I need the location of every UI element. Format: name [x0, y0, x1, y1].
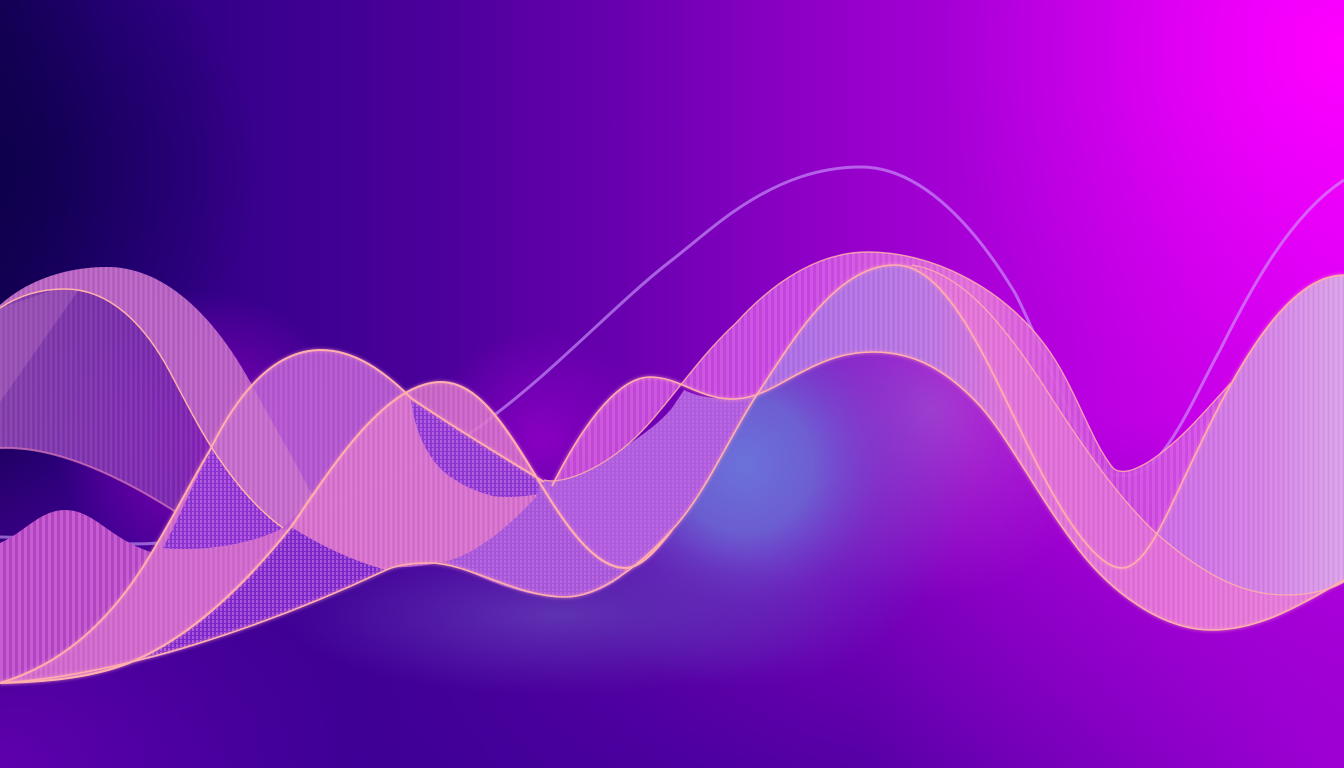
blue glow beneath the ribbons	[332, 352, 1046, 680]
ribbon: back left	[0, 267, 386, 567]
soft glow on ribbon edges	[0, 265, 1344, 683]
ribbon: upper left band	[0, 267, 313, 528]
ribbon: centre left lobe	[210, 350, 544, 567]
ribbon: front pink	[0, 382, 672, 683]
bright ribbon edge lines	[0, 252, 1344, 683]
ribbon: far right lobe	[1145, 275, 1344, 595]
ribbon: right back hatched	[544, 252, 1344, 630]
thin lavender line	[0, 167, 1344, 544]
hatched purple gaps	[129, 400, 625, 663]
ribbon: centre lavender segment	[540, 390, 758, 568]
ribbon: right light band	[895, 265, 1156, 568]
small striped wave at left	[0, 510, 154, 683]
ribbon: pink left sweep	[0, 450, 386, 683]
ribbon: right main band	[758, 265, 1344, 630]
